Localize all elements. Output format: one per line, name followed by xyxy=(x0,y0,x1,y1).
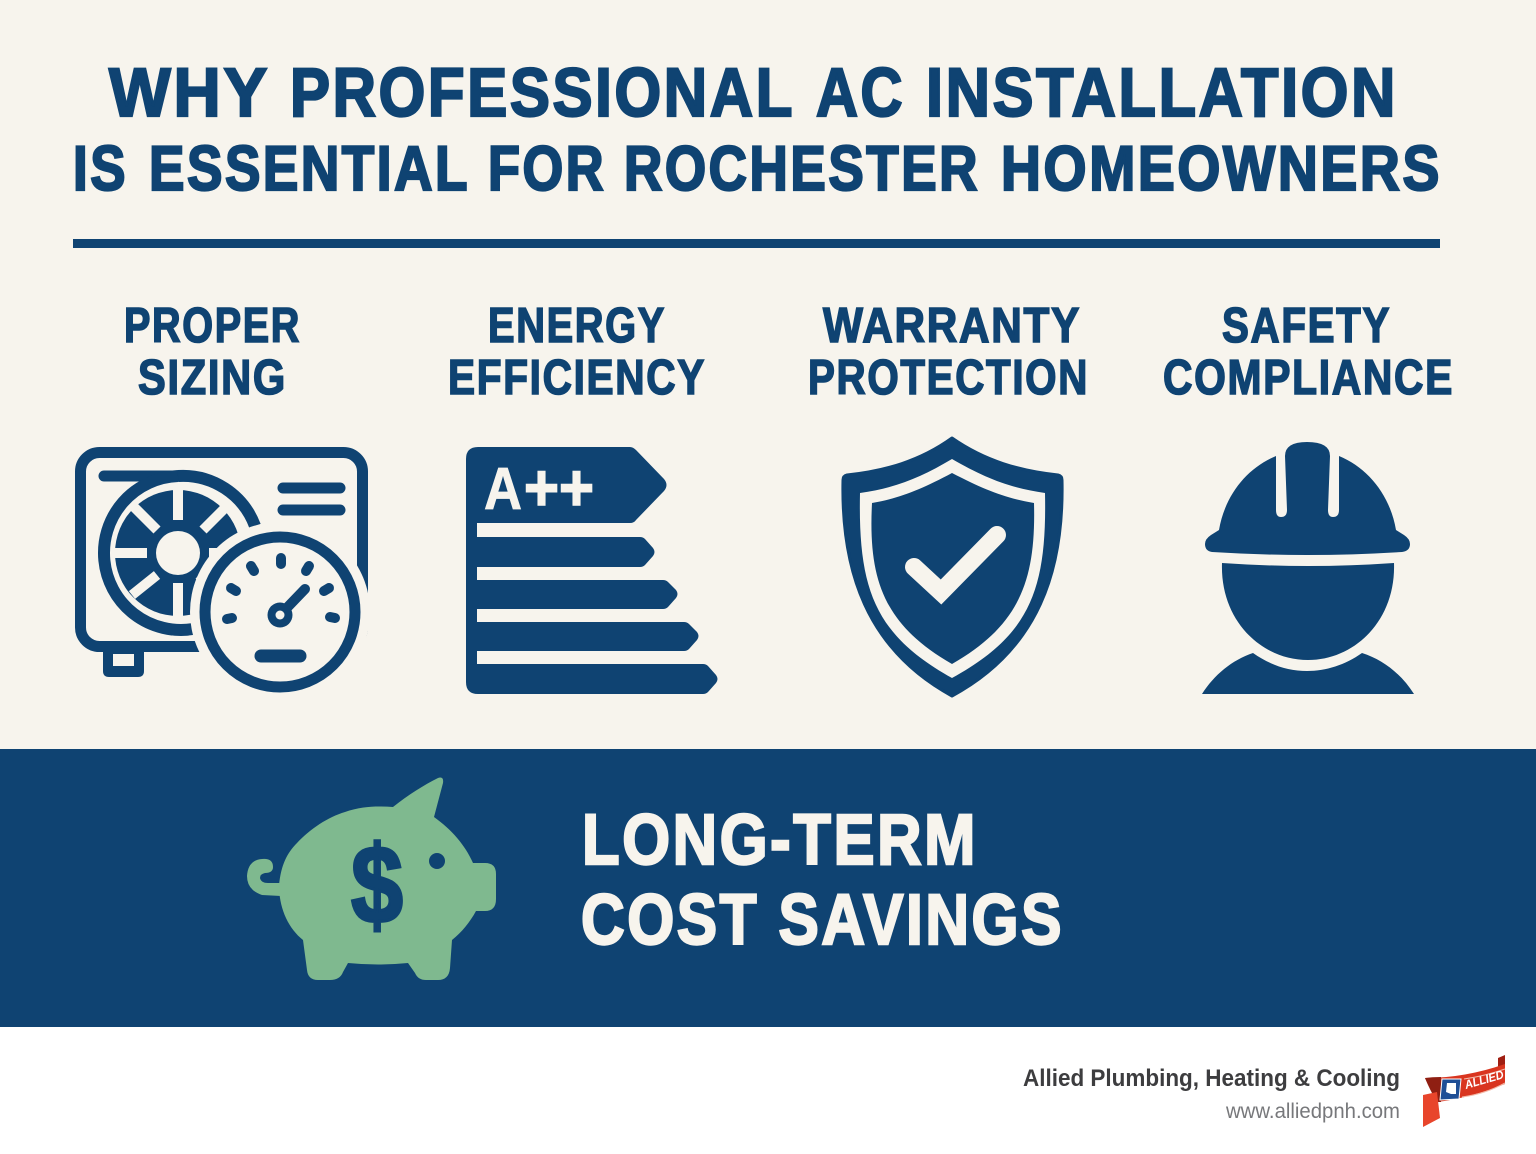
heading: proper sizing xyxy=(124,299,301,405)
title: PROFESSIONAL xyxy=(290,54,795,131)
heading: safety compliance: COMPLIANCE xyxy=(1163,351,1454,405)
heading: energy efficiency: ENERGY xyxy=(488,299,666,353)
icon: shield with check xyxy=(843,438,1062,696)
icon: piggy bank xyxy=(247,778,496,980)
title: HOMEOWNERS xyxy=(1001,134,1442,204)
panel: energy efficiency xyxy=(448,299,718,694)
panel: safety compliance xyxy=(1163,299,1454,694)
company name and url xyxy=(1023,1065,1400,1123)
icon: energy rating label: ++ xyxy=(524,450,594,524)
title xyxy=(73,54,1442,204)
company name and url: Allied Plumbing, Heating & Cooling xyxy=(1023,1065,1400,1092)
icon: piggy bank: $ xyxy=(351,824,403,947)
title: WHY xyxy=(109,54,270,131)
banner text: COST SAVINGS xyxy=(581,881,1064,960)
panel: proper sizing xyxy=(80,299,370,702)
heading: safety compliance: SAFETY xyxy=(1222,299,1391,353)
heading: energy efficiency: EFFICIENCY xyxy=(448,351,706,405)
banner text xyxy=(581,801,1064,960)
title: INSTALLATION xyxy=(926,54,1398,131)
heading: warranty protection: WARRANTY xyxy=(823,299,1081,353)
company name and url: www.alliedpnh.com xyxy=(1225,1100,1400,1123)
heading: proper sizing: PROPER xyxy=(124,299,301,353)
heading: proper sizing: SIZING xyxy=(138,351,287,405)
title: ESSENTIAL xyxy=(149,134,470,204)
icon: worker with hard hat xyxy=(1202,442,1414,694)
icon: Allied ribbon logo xyxy=(1423,1055,1506,1127)
title: AC xyxy=(816,54,905,131)
heading: warranty protection: PROTECTION xyxy=(808,351,1089,405)
heading: safety compliance xyxy=(1163,299,1454,405)
icon: energy rating label: A xyxy=(484,456,522,522)
title: IS xyxy=(73,134,128,204)
title: FOR xyxy=(488,134,606,204)
heading: energy efficiency xyxy=(448,299,706,405)
panel: warranty protection xyxy=(808,299,1089,696)
heading: warranty protection xyxy=(808,299,1089,405)
banner: long-term cost savings xyxy=(0,749,1536,1027)
title: ROCHESTER xyxy=(624,134,980,204)
icon: AC unit with gauge xyxy=(80,452,370,702)
icon: energy rating label xyxy=(466,447,718,694)
banner text: LONG-TERM xyxy=(582,801,978,880)
footer xyxy=(0,1027,1536,1154)
icon: Allied ribbon logo: ALLIED xyxy=(1462,1067,1506,1092)
